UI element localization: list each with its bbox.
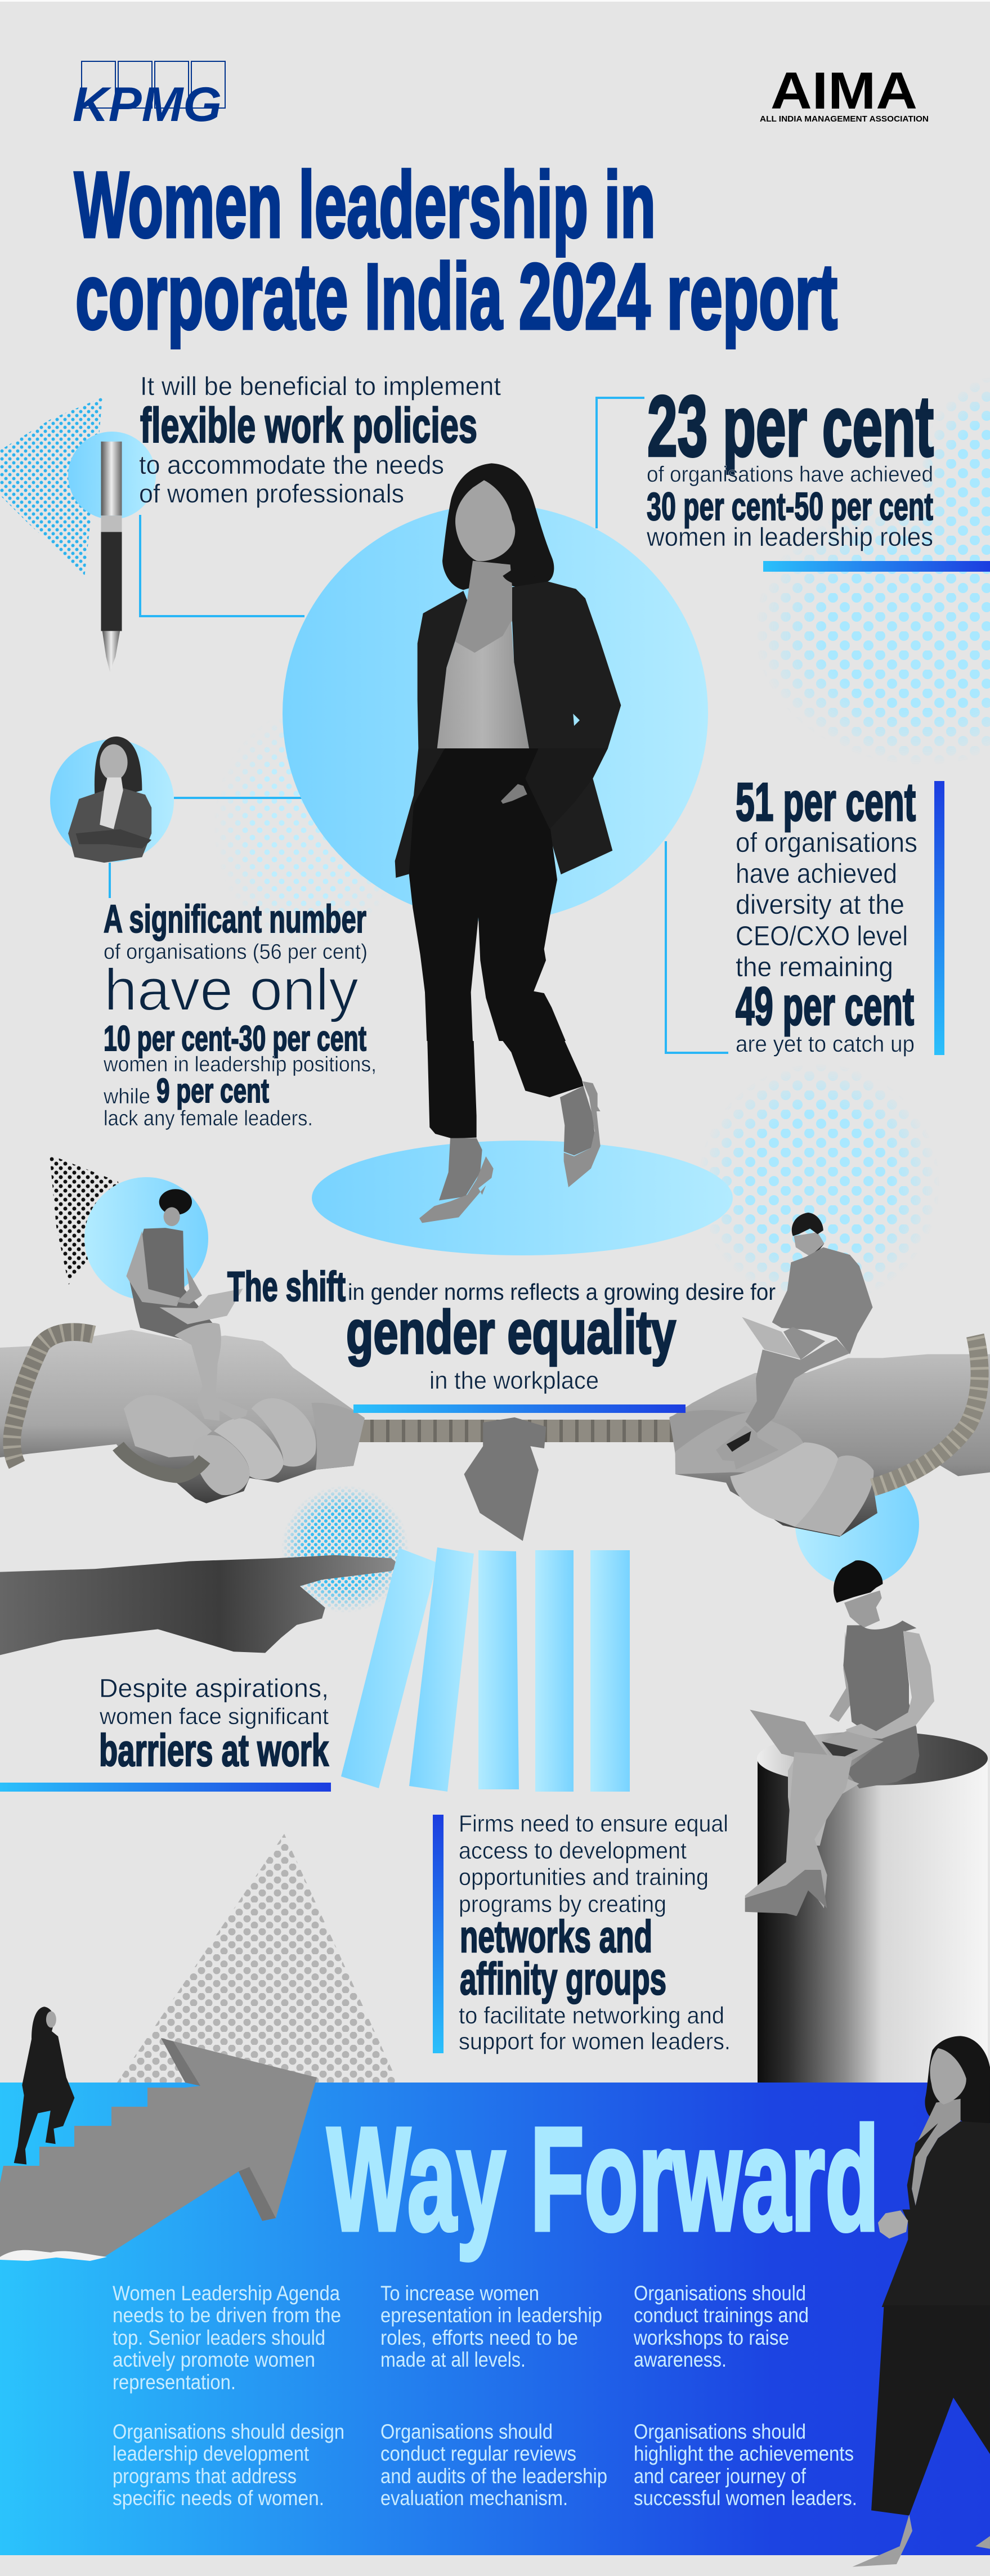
text: significant number: while — [103, 1085, 150, 1109]
text: column 3 row 2: and career journey of — [634, 2465, 807, 2488]
text: column 1 row 2: leadership development — [113, 2442, 310, 2465]
text: column 2 row 1: epresentation in leadership — [380, 2304, 602, 2327]
circle: portrait background — [50, 739, 174, 862]
band background — [0, 2083, 990, 2555]
text: barriers: barriers at work — [99, 1725, 329, 1775]
text: column 3 row 2: highlight the achievements — [634, 2442, 854, 2465]
text: column 3 row 2: Organisations should — [634, 2420, 806, 2443]
connector: portrait — [110, 798, 302, 898]
panel: way forward — [0, 2083, 990, 2555]
text: significant number: have only — [104, 957, 359, 1023]
text: column 1 row 2: Organisations should design — [113, 2420, 344, 2443]
circle: behind sitting woman — [84, 1177, 208, 1300]
text: networks: access to development — [459, 1837, 687, 1864]
title: Women leadership in — [74, 153, 656, 257]
text: barriers: women face significant — [99, 1703, 329, 1729]
logo: AIMA: ALL INDIA MANAGEMENT ASSOCIATION — [760, 114, 929, 124]
text: barriers: Despite aspirations, — [99, 1673, 329, 1703]
text: column 3 row 2 — [634, 2420, 857, 2510]
text: flexible work policies: flexible work policies — [140, 398, 477, 453]
text: networks: programs by creating — [459, 1891, 666, 1917]
text: flexible work policies: It will be beneficial to implement — [140, 371, 501, 401]
circle: behind main woman — [283, 504, 708, 922]
bar 4 — [535, 1550, 574, 1792]
text: column 3 row 1: workshops to raise — [633, 2326, 789, 2349]
text: 51 per cent: the remaining — [736, 952, 893, 982]
halftone: lower right circle — [706, 1070, 933, 1291]
bar 2 — [409, 1547, 474, 1792]
legs — [852, 2305, 990, 2567]
bar: 23 per cent — [763, 561, 990, 572]
bar 5 — [590, 1550, 630, 1792]
text: column 1 row 2 — [113, 2420, 344, 2510]
icon: pen — [101, 442, 122, 672]
text: flexible work policies — [139, 371, 501, 508]
text: significant number: lack any female leaders. — [104, 1107, 313, 1130]
text: networks: opportunities and training — [459, 1864, 709, 1890]
text: column 1 row 1: actively promote women — [113, 2348, 315, 2371]
text: column 3 row 1: Organisations should — [634, 2282, 806, 2305]
figure: right hand — [669, 1335, 990, 1537]
text: flexible work policies: of women professionals — [139, 479, 404, 508]
text: column 2 row 2: Organisations should — [380, 2420, 553, 2443]
text: column 1 row 2: specific needs of women. — [113, 2487, 324, 2510]
text: column 1 row 1: top. Senior leaders should — [113, 2326, 325, 2349]
bar: 51 per cent — [934, 781, 944, 1055]
text: 51 per cent — [736, 772, 917, 1057]
cylinder — [757, 1731, 988, 2083]
halftone: upper right strip — [922, 385, 990, 585]
text: the shift: gender equality — [346, 1298, 676, 1367]
title — [74, 153, 837, 349]
figure: woman on stairs — [14, 2007, 74, 2165]
text: networks: Firms need to ensure equal — [459, 1810, 728, 1837]
text: column 3 row 1: awareness. — [634, 2348, 727, 2371]
text: column 3 row 2: successful women leaders. — [634, 2487, 857, 2510]
text: 51 per cent: CEO/CXO level — [736, 921, 908, 952]
text: significant number: of organisations (56 per cent) — [104, 940, 368, 964]
text: networks — [459, 1810, 731, 2054]
text: column 2 row 1: To increase women — [380, 2282, 539, 2305]
lower body — [395, 748, 612, 1041]
figure: pointing hand — [0, 1555, 399, 1655]
text: the shift: in the workplace — [429, 1367, 599, 1394]
text: networks: networks and — [460, 1911, 652, 1962]
connector: flexible work policies — [140, 515, 304, 616]
bar: networks — [433, 1815, 444, 2053]
chart-like blocks: falling bars — [341, 1547, 630, 1792]
figure: woman on left hand — [126, 1189, 248, 1421]
halftone: behind finger — [281, 1486, 409, 1613]
text: significant number: women in leadership positions, — [103, 1053, 377, 1076]
text: column 2 row 1: roles, efforts need to be — [380, 2326, 578, 2349]
smoke — [0, 2250, 107, 2261]
icon: stair arrow — [0, 2038, 317, 2261]
halftone: black triangle — [50, 1155, 121, 1285]
bar: barriers — [0, 1783, 331, 1792]
text: column 1 row 1: needs to be driven from the — [113, 2304, 341, 2327]
halftone: top right light blue — [754, 495, 990, 765]
text: column 2 row 1 — [380, 2282, 602, 2371]
text: 51 per cent: diversity at the — [736, 890, 904, 920]
text: column 1 row 2: programs that address — [113, 2465, 297, 2488]
figure: right woman — [852, 2036, 990, 2567]
text: networks: to facilitate networking and — [459, 2002, 724, 2029]
connector: 51 per cent — [666, 841, 728, 1053]
text: the shift: The shift — [227, 1263, 346, 1310]
header logos — [73, 61, 929, 132]
bar 1 — [341, 1548, 437, 1788]
upper body — [418, 463, 621, 748]
text: networks: affinity groups — [460, 1954, 666, 2004]
figure: portrait woman — [68, 737, 151, 863]
bar: gender equality — [353, 1404, 686, 1413]
text: 51 per cent: are yet to catch up — [736, 1031, 915, 1057]
halftone: behind portrait — [222, 727, 379, 935]
text: 51 per cent: have achieved — [736, 859, 897, 889]
logo: AIMA: AIMA — [771, 61, 917, 120]
rope — [355, 1420, 698, 1442]
text: the shift — [227, 1263, 776, 1394]
text: column 3 row 1 — [633, 2282, 809, 2371]
text: significant number — [103, 897, 377, 1130]
halftone: top left blue — [0, 397, 102, 578]
text: 23 per cent: of organisations have achieved — [647, 463, 933, 487]
circle: behind right hand — [795, 1462, 919, 1586]
halftone: gray triangle — [117, 1834, 398, 2083]
upper body — [126, 1189, 214, 1339]
text: 23 per cent — [646, 378, 934, 551]
text: column 2 row 2 — [380, 2420, 607, 2510]
figure: main woman — [395, 463, 621, 1223]
text: column 2 row 1: made at all levels. — [380, 2348, 526, 2371]
text: column 1 row 1: Women Leadership Agenda — [113, 2282, 340, 2305]
logo: KPMG: KPMG — [73, 78, 222, 132]
legs — [745, 1752, 852, 1916]
portrait: woman with crossed arms — [50, 737, 174, 863]
upper body — [750, 1560, 934, 1846]
feet — [419, 1041, 601, 1223]
icon: cloth knot — [464, 1417, 546, 1541]
text: 23 per cent: women in leadership roles — [646, 522, 933, 551]
text: significant number: 9 per cent — [156, 1072, 269, 1110]
text: column 2 row 2: evaluation mechanism. — [380, 2487, 568, 2510]
text: significant number: 10 per cent-30 per cent — [104, 1019, 366, 1058]
connector: 23 per cent — [597, 398, 644, 528]
ellipse: floor — [312, 1141, 733, 1255]
bar 3 — [478, 1550, 519, 1789]
text: column 3 row 1: conduct trainings and — [634, 2304, 809, 2327]
text: barriers — [99, 1673, 329, 1775]
text: 51 per cent: of organisations — [736, 828, 917, 858]
text: networks: support for women leaders. — [459, 2028, 731, 2054]
text: flexible work policies: to accommodate the needs — [139, 450, 444, 479]
legs and laptop — [159, 1289, 248, 1421]
circle: behind pen — [68, 432, 156, 519]
figure: left hand — [0, 1330, 365, 1504]
text: column 2 row 2: and audits of the leadership — [380, 2465, 607, 2488]
text: column 2 row 2: conduct regular reviews — [380, 2442, 576, 2465]
text: column 1 row 1: representation. — [113, 2371, 236, 2394]
text: the shift: in gender norms reflects a growing desire for — [348, 1279, 776, 1305]
text: significant number: A significant number — [104, 897, 366, 941]
figure: man on right hand — [716, 1213, 873, 1470]
upper body — [878, 2036, 990, 2307]
text: column 1 row 1 — [113, 2282, 341, 2394]
figure: woman on cylinder — [745, 1560, 934, 1916]
